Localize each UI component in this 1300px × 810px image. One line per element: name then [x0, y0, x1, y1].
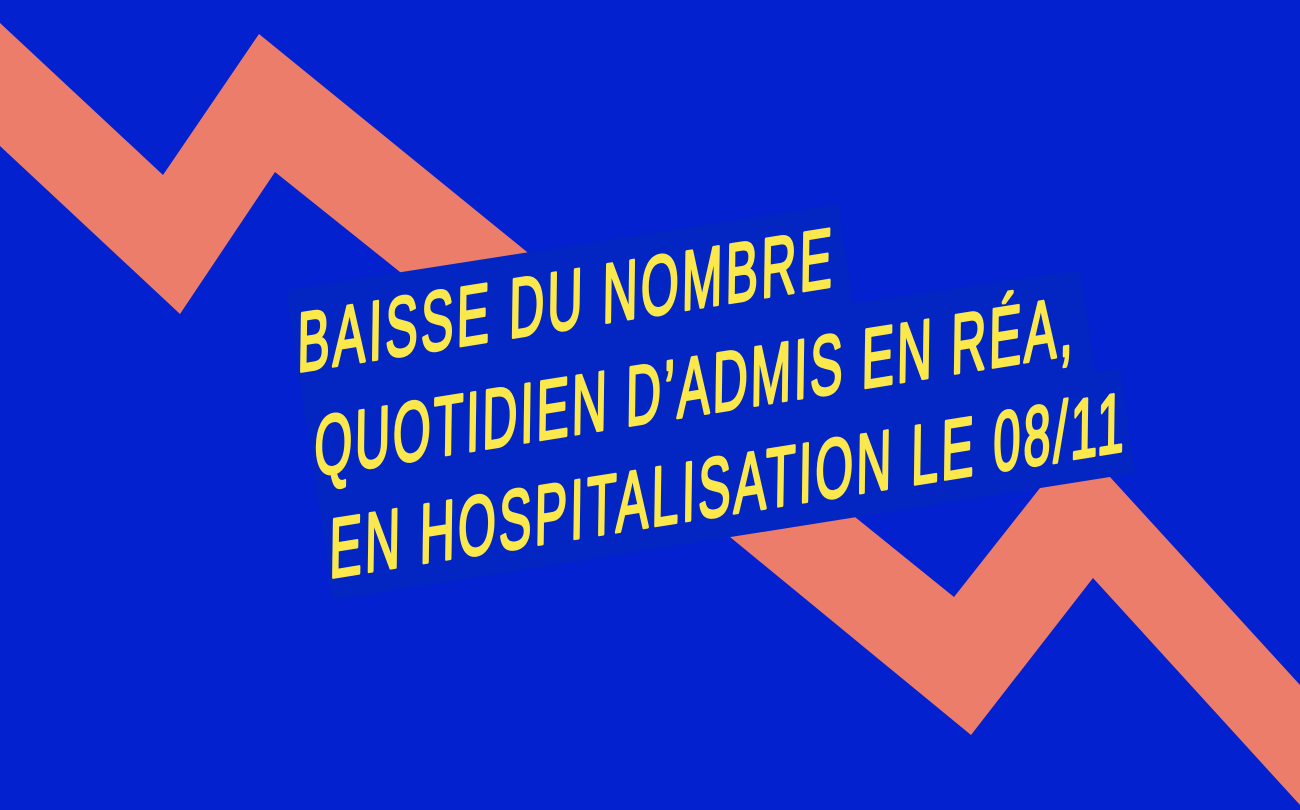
title line 1: BAISSE DU NOMBRE — [297, 211, 833, 390]
title block — [286, 204, 1135, 600]
title line 3: EN HOSPITALISATION LE 08/11 — [329, 375, 1125, 596]
title background panel — [286, 204, 1135, 600]
title line 2: QUOTIDIEN D’ADMIS EN RÉA, — [314, 279, 1074, 494]
